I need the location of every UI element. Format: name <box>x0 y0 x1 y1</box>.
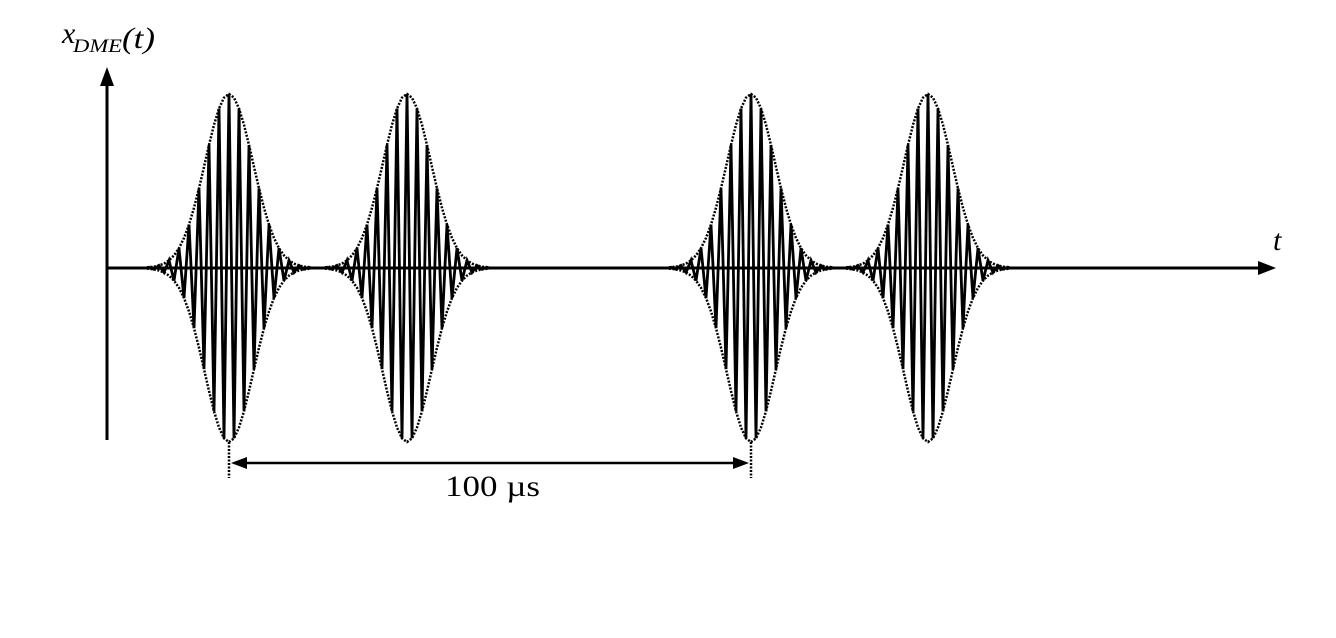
y axis label: x <box>62 17 75 50</box>
x axis label: t <box>1273 224 1282 257</box>
pulse 3 <box>669 94 833 442</box>
pulse 2 <box>325 94 489 442</box>
pulse 1 <box>147 94 311 442</box>
measurement: 100 us interval <box>229 442 751 503</box>
pulse 4 <box>846 94 1010 442</box>
y axis label: (t) <box>122 22 155 55</box>
y axis with arrow <box>100 67 114 440</box>
x axis with arrow <box>107 261 1276 275</box>
y axis label: DME <box>72 36 122 57</box>
measurement: 100 us interval: 100 µs <box>445 470 540 503</box>
